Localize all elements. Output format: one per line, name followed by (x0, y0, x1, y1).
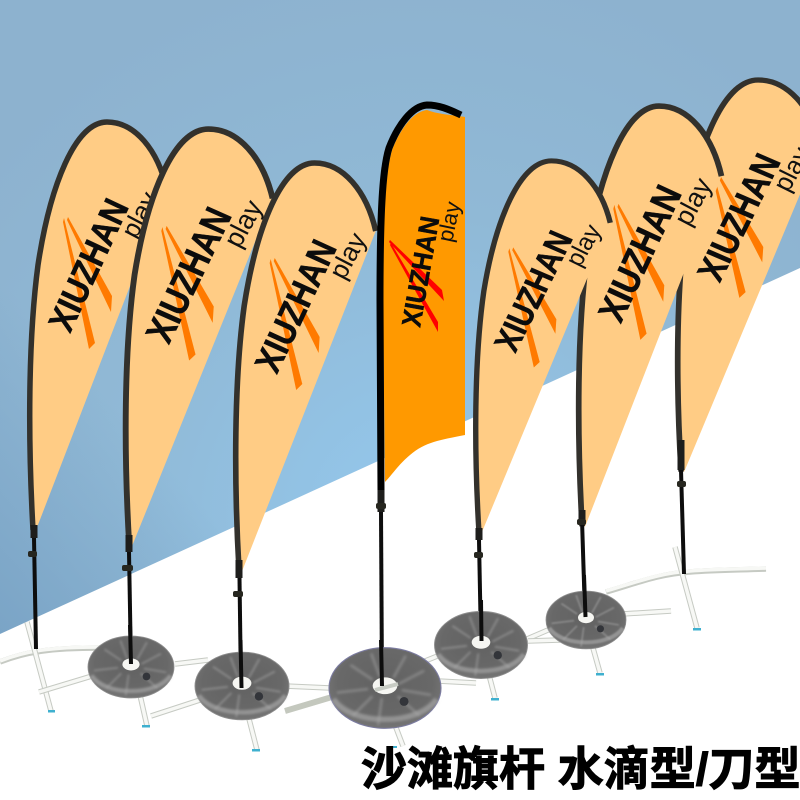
stand: flag 1 (0, 622, 100, 712)
stand: flag 7 (606, 547, 766, 630)
stand: flag 2 (140, 660, 208, 728)
flag 3 teardrop: XIUZHAN (248, 234, 345, 379)
flag 6 teardrop (579, 106, 721, 526)
pole: flag 2 (122, 535, 133, 665)
pole: flag 4 (376, 490, 386, 685)
flag 4 knife flag: play (432, 199, 465, 244)
flag 2 teardrop: play (217, 195, 269, 252)
water base 5 (434, 600, 528, 678)
flag 4 knife flag: XIUZHAN (396, 214, 445, 329)
flag 3 teardrop (236, 163, 376, 571)
pole: flag 3 (233, 560, 243, 688)
stand: flag 3 (248, 686, 332, 752)
pole: flag 7 (677, 440, 686, 574)
flag 2 teardrop (126, 129, 273, 545)
water base 3 (195, 640, 289, 720)
pole: flag 6 (577, 510, 586, 614)
flag 5 teardrop (476, 161, 610, 532)
water base 2 (88, 625, 174, 698)
flag 1 teardrop: play (115, 187, 164, 243)
flag 4 knife flag (380, 105, 465, 490)
title: 沙滩旗杆 水滴型/刀型 (361, 743, 800, 795)
pole: flag 5 (474, 528, 483, 643)
flag 5 teardrop: XIUZHAN (486, 225, 580, 357)
flag 7 teardrop: XIUZHAN (690, 148, 789, 287)
flag 6 teardrop: play (668, 173, 718, 230)
pole: flag 1 (28, 525, 37, 649)
stand: flag 4 (393, 655, 476, 748)
flag 2 teardrop: XIUZHAN (137, 201, 240, 349)
flag 6 teardrop: XIUZHAN (591, 179, 690, 328)
flag 1 teardrop (30, 122, 167, 530)
water base 4 (329, 640, 441, 728)
white floor (0, 268, 800, 800)
water base 6 (546, 575, 626, 649)
flag 7 teardrop (678, 80, 800, 472)
stand: flag 5 (489, 630, 560, 700)
flag 5 teardrop: play (561, 220, 608, 271)
flag 3 teardrop: play (323, 227, 373, 284)
stand: flag 6 (593, 611, 671, 676)
flag 1 teardrop: XIUZHAN (41, 193, 137, 338)
